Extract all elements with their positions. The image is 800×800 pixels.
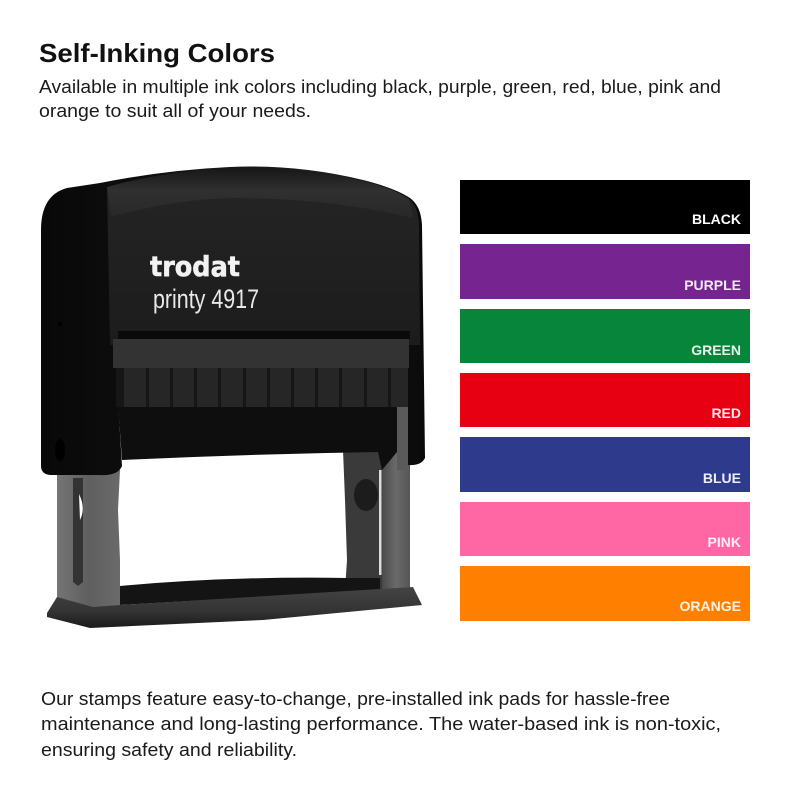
swatch: black [460, 180, 750, 234]
swatch: red [460, 373, 750, 427]
model name: printy 4917 [153, 284, 259, 314]
swatch: red: RED [711, 405, 741, 421]
intro text [39, 76, 721, 121]
swatch: green: GREEN [691, 342, 741, 358]
swatch: orange [460, 566, 750, 621]
swatch: orange: ORANGE [680, 598, 741, 614]
swatch: purple: PURPLE [684, 277, 741, 293]
swatch: pink: PINK [708, 534, 741, 550]
closing text: maintenance and long-lasting performance. The water-based ink is non-toxic, [41, 713, 721, 734]
swatch: pink [460, 502, 750, 556]
title: Self-Inking Colors [39, 38, 275, 68]
stamp illustration [41, 167, 425, 628]
closing text [41, 688, 721, 760]
swatch: blue: BLUE [703, 470, 741, 486]
swatch: green [460, 309, 750, 363]
swatch: blue [460, 437, 750, 492]
closing text: Our stamps feature easy-to-change, pre-installed ink pads for hassle-free [41, 688, 670, 709]
stamp legs [57, 450, 410, 608]
stamp base [47, 578, 422, 628]
stamp housing [41, 167, 425, 475]
closing text: ensuring safety and reliability. [41, 739, 297, 760]
swatch: black: BLACK [692, 211, 741, 227]
brand logo: trodat [150, 250, 240, 283]
intro text: Available in multiple ink colors including black, purple, green, red, blue, pink and [39, 76, 721, 97]
stamp inner frame [118, 405, 397, 470]
ribbed band [116, 368, 408, 407]
swatch: purple [460, 244, 750, 299]
intro text: orange to suit all of your needs. [39, 100, 311, 121]
